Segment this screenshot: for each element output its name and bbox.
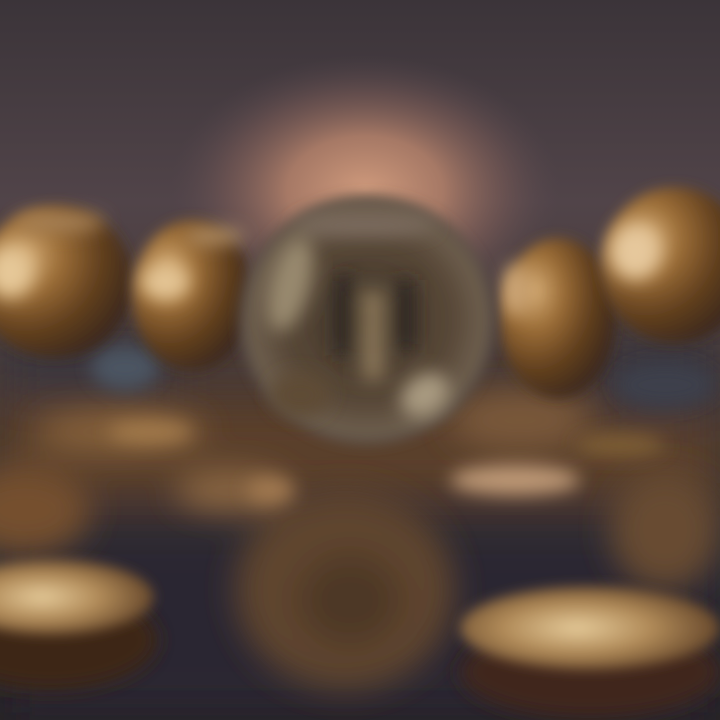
gold sphere far left	[0, 206, 133, 358]
background glow	[170, 55, 560, 325]
gold bowl right	[460, 586, 720, 718]
gold sphere far right	[601, 187, 720, 343]
gold sphere left	[132, 220, 252, 370]
table highlight left and right	[91, 346, 715, 504]
reflections and table highlights	[0, 390, 720, 690]
table surface band	[0, 345, 720, 720]
glass sphere inner details	[258, 213, 458, 426]
gold sphere right	[500, 238, 616, 398]
central glass sphere	[239, 195, 495, 445]
sphere highlights	[0, 212, 661, 316]
gold bowl left	[0, 559, 158, 690]
